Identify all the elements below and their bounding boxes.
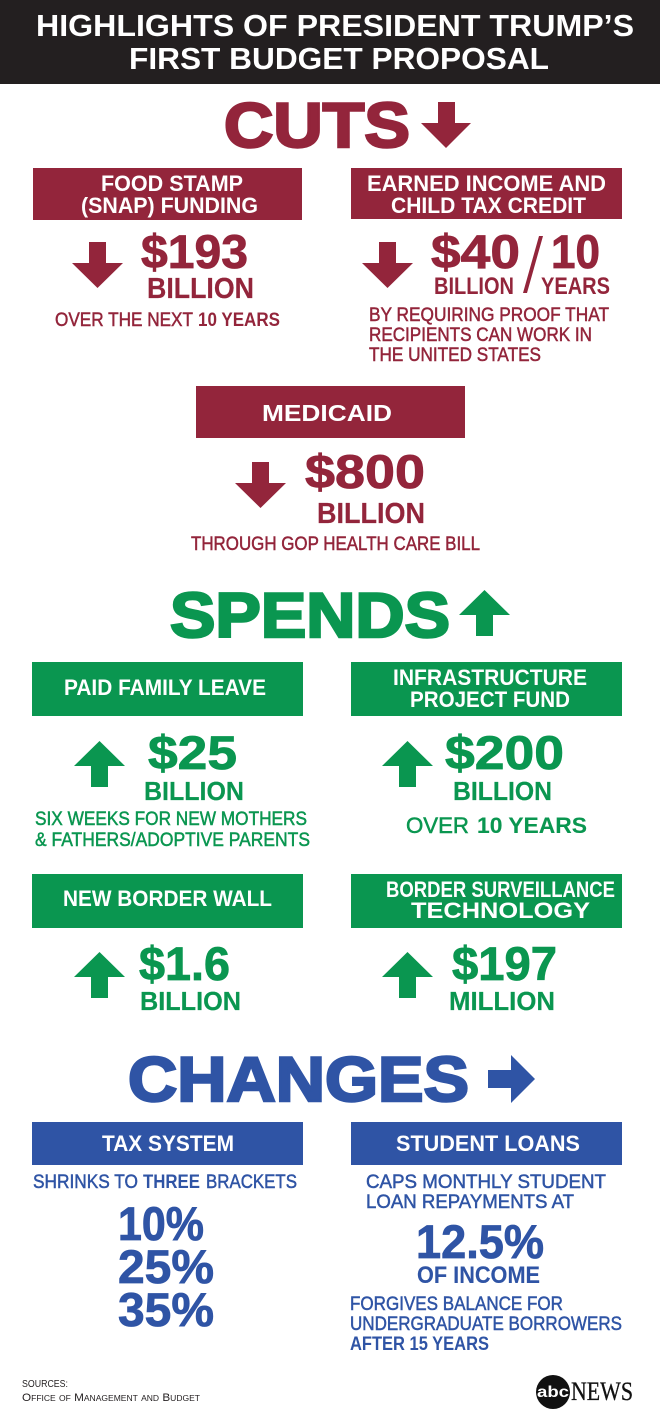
- panel: infrastructure project fund: BILLION: [453, 776, 552, 806]
- panel: paid family leave: & FATHERS/ADOPTIVE PARENTS: [35, 829, 310, 851]
- logo: abc news: [536, 1375, 633, 1409]
- panel: earned income and child tax credit: BILLION: [434, 273, 514, 300]
- logo: abc news: abc: [537, 1384, 569, 1401]
- logo: abc news: NEWS: [571, 1377, 633, 1406]
- panel: earned income and child tax credit: $40: [431, 225, 520, 278]
- panel: tax system: SHRINKS TO: [33, 1171, 138, 1193]
- panel: earned income and child tax credit: YEARS: [541, 273, 610, 300]
- panel: tax system: TAX SYSTEM: [102, 1131, 234, 1156]
- panel: student loans: 12.5%: [416, 1215, 544, 1268]
- panel: medicaid: [191, 386, 480, 555]
- panel: food stamp funding: OVER THE NEXT: [55, 309, 193, 331]
- panel: paid family leave: SIX WEEKS FOR NEW MOTHERS: [35, 808, 307, 830]
- panel: tax system: THREE: [143, 1171, 200, 1193]
- heading: spends: SPENDS: [170, 581, 450, 651]
- title banner: FIRST BUDGET PROPOSAL: [129, 41, 549, 76]
- panel: student loans: FORGIVES BALANCE FOR: [350, 1293, 563, 1315]
- panel: student loans: STUDENT LOANS: [396, 1131, 580, 1156]
- panel: tax system: 25%: [118, 1240, 214, 1293]
- title banner: HIGHLIGHTS OF PRESIDENT TRUMP’S: [36, 8, 634, 43]
- sources: [22, 1379, 200, 1404]
- panel: earned income and child tax credit: [351, 168, 622, 366]
- panel: border surveillance technology: TECHNOLOGY: [411, 898, 590, 923]
- panel: food stamp funding: $193: [141, 225, 248, 278]
- panel: medicaid: BILLION: [317, 498, 425, 530]
- panel: paid family leave: PAID FAMILY LEAVE: [64, 675, 266, 700]
- panel: border surveillance technology: MILLION: [449, 986, 555, 1016]
- panel: student loans: AFTER 15 YEARS: [350, 1333, 489, 1355]
- panel: student loans: OF INCOME: [417, 1262, 540, 1289]
- panel: student loans: LOAN REPAYMENTS AT: [366, 1191, 574, 1213]
- panel: medicaid: THROUGH GOP HEALTH CARE BILL: [191, 533, 480, 555]
- panel: earned income and child tax credit: THE UNITED STATES: [369, 344, 541, 366]
- panel: earned income and child tax credit: RECIPIENTS CAN WORK IN: [369, 324, 592, 346]
- heading: changes: CHANGES: [128, 1045, 469, 1115]
- panel: paid family leave: BILLION: [144, 776, 244, 806]
- panel: food stamp funding: (SNAP) FUNDING: [81, 193, 258, 218]
- panel: infrastructure project fund: 10 YEARS: [477, 813, 587, 838]
- sources: Office of Management and Budget: [22, 1392, 200, 1404]
- panel: tax system: [32, 1122, 303, 1336]
- panel: food stamp funding: FOOD STAMP: [101, 171, 243, 196]
- panel: paid family leave: $25: [148, 726, 237, 779]
- panel: earned income and child tax credit: EARNED INCOME AND: [367, 171, 606, 196]
- panel: earned income and child tax credit: BY REQUIRING PROOF THAT: [369, 304, 609, 326]
- panel: new border wall: [32, 874, 303, 1016]
- panel: infrastructure project fund: $200: [445, 726, 564, 779]
- panel: student loans: [350, 1122, 622, 1355]
- panel: earned income and child tax credit: CHILD TAX CREDIT: [391, 193, 587, 218]
- panel: tax system: 10%: [118, 1197, 204, 1250]
- panel: tax system: 35%: [118, 1283, 214, 1336]
- panel: infrastructure project fund: INFRASTRUCTURE: [393, 665, 587, 690]
- panel: food stamp funding: BILLION: [147, 273, 254, 305]
- panel: student loans: UNDERGRADUATE BORROWERS: [350, 1313, 622, 1335]
- panel: medicaid: $800: [305, 445, 425, 498]
- panel: border surveillance technology: $197: [452, 937, 557, 990]
- heading: cuts: CUTS: [224, 91, 410, 161]
- panel: food stamp funding: 10 YEARS: [198, 309, 280, 331]
- sources: SOURCES:: [22, 1379, 68, 1390]
- panel: food stamp funding: [33, 168, 302, 331]
- panel: infrastructure project fund: OVER: [406, 813, 469, 838]
- panel: medicaid: MEDICAID: [262, 400, 392, 426]
- panel: border surveillance technology: [351, 874, 622, 1016]
- heading: cuts: [224, 91, 471, 161]
- panel: paid family leave: [32, 662, 310, 851]
- panel: infrastructure project fund: PROJECT FUND: [410, 687, 570, 712]
- panel: tax system: BRACKETS: [206, 1171, 297, 1193]
- panel: new border wall: BILLION: [140, 986, 241, 1016]
- panel: new border wall: $1.6: [139, 937, 230, 990]
- panel: border surveillance technology: BORDER SURVEILLANCE: [386, 877, 615, 902]
- panel: student loans: CAPS MONTHLY STUDENT: [366, 1171, 606, 1193]
- panel: infrastructure project fund: [351, 662, 622, 838]
- title banner: [0, 0, 660, 84]
- panel: earned income and child tax credit: 10: [551, 225, 600, 278]
- panel: new border wall: NEW BORDER WALL: [63, 886, 272, 911]
